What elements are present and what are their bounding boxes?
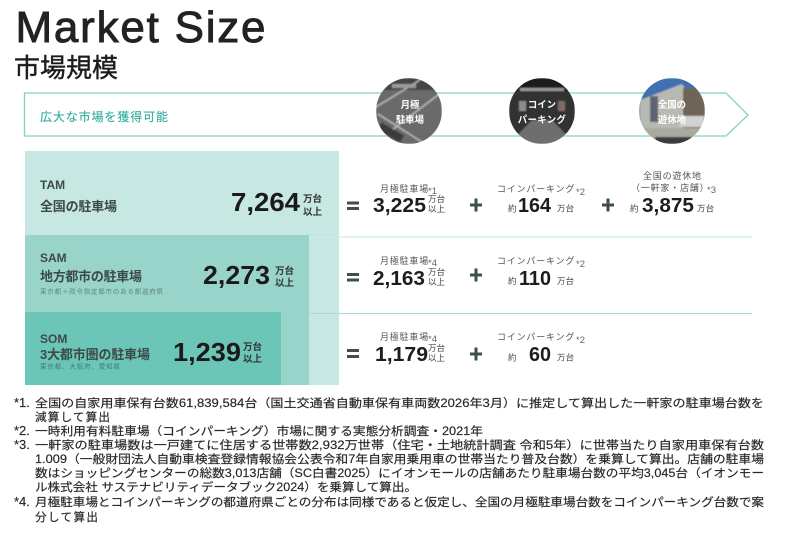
breakdown: TAM: （一軒家・店舗）: [631, 182, 709, 193]
breakdown: TAM: 以上: [428, 204, 446, 214]
footnotes: *4.: [14, 494, 30, 509]
breakdown: TAM: *2: [576, 187, 585, 198]
circle: coin parking: [509, 78, 575, 144]
footnotes: *2.: [14, 423, 30, 438]
panel: TAM: 全国の駐車場: [40, 199, 117, 214]
breakdown: SOM: 万台: [557, 352, 575, 362]
footnotes: 1.009（一般財団法人自動車検査登録情報協会公表令和7年自家用乗用車の世帯当たり普及台数）を乗算して算出。店舗の駐車場: [35, 452, 764, 466]
footnotes: 一軒家の駐車場数は一戸建てに住居する世帯数2,932万世帯（住宅・土地統計調査 令和5年）に世帯当たり自家用車保有台数: [35, 438, 764, 452]
panel: TAM: [25, 151, 339, 235]
panel: SAM: 地方都市の駐車場: [40, 269, 142, 284]
breakdown: TAM: 全国の遊休地: [643, 170, 702, 181]
breakdown: SOM: 約: [508, 352, 517, 362]
footnotes: 全国の自家用車保有台数61,839,584台（国土交通省自動車保有車両数2026年3月）に推定して算出した一軒家の駐車場台数を: [35, 396, 764, 410]
breakdown: SAM: *4: [428, 258, 437, 269]
breakdown: SAM: 以上: [428, 277, 446, 287]
subtitle: 市場規模: [14, 53, 118, 83]
title: Market Size: [16, 3, 266, 52]
panel: SOM: 1,239: [173, 337, 241, 367]
breakdown: SOM: [347, 331, 585, 366]
circle: monthly parking: [376, 78, 442, 144]
breakdown: TAM: *3: [707, 185, 716, 196]
breakdown: TAM: 万台: [557, 204, 575, 214]
panel: SAM: 2,273: [203, 260, 270, 290]
row divider SOM: [309, 312, 752, 314]
panel: SOM: SOM: [40, 332, 67, 346]
circle: coin parking: パーキング: [518, 114, 567, 125]
footnotes: 一時利用有料駐車場（コインパーキング）市場に関する実態分析調査・2021年: [35, 424, 483, 438]
breakdown: TAM: 3,225: [373, 195, 426, 217]
breakdown: SAM: [347, 255, 585, 290]
breakdown: TAM: 164: [518, 195, 552, 217]
footnotes: *1.: [14, 395, 30, 410]
panel: SAM: SAM: [40, 251, 67, 265]
breakdown: TAM: 万台: [428, 194, 446, 204]
panel: TAM: TAM: [40, 178, 65, 192]
circle: idle land: 遊休地: [658, 114, 687, 125]
breakdown: SAM: 月極駐車場: [380, 255, 429, 266]
breakdown: SOM: コインパーキング: [497, 331, 575, 342]
panel: SAM: 東京都＋政令指定都市のある都道府県: [40, 286, 164, 296]
panel: SOM: 万台: [243, 341, 263, 353]
breakdown: SOM: *4: [428, 334, 437, 345]
breakdown: SAM: 万台: [428, 267, 446, 277]
breakdown: TAM: 約: [630, 204, 639, 214]
breakdown: TAM: 3,875: [642, 195, 694, 217]
breakdown: SOM: 60: [529, 344, 551, 366]
circle: coin parking: コイン: [528, 99, 556, 110]
banner arrow: [24, 93, 748, 136]
panel: SOM: 以上: [243, 353, 263, 365]
breakdown: SAM: 約: [508, 276, 517, 286]
breakdown: SAM: コインパーキング: [497, 255, 575, 266]
breakdown: SAM: 万台: [557, 276, 575, 286]
circle: idle land: [639, 78, 705, 144]
breakdown: TAM: *1: [428, 186, 437, 197]
panel: TAM: 7,264: [231, 187, 301, 217]
panel: SOM: 東京都、大阪府、愛知県: [40, 362, 120, 370]
circle: monthly parking: 月極: [401, 99, 420, 110]
footnotes: [14, 395, 764, 524]
panel: SOM: [25, 312, 309, 385]
breakdown: SOM: *2: [576, 335, 585, 346]
breakdown: SOM: 以上: [428, 353, 446, 363]
footnotes: *3.: [14, 437, 30, 452]
footnotes: 分して算出: [35, 510, 98, 524]
breakdown: SOM: 万台: [428, 343, 446, 353]
breakdown: SOM: 1,179: [375, 344, 428, 366]
panel: SAM: 以上: [275, 277, 295, 289]
banner text: 広大な市場を獲得可能: [40, 109, 168, 124]
breakdown: SAM: 2,163: [373, 268, 425, 290]
circle: idle land: 全国の: [658, 99, 686, 110]
footnotes: ル株式会社 サステナビリティデータブック2024）を乗算して算出。: [35, 480, 417, 494]
footnotes: 数はショッピングセンターの総数3,013店舗（SC白書2025）にイオンモールの店舗あたり駐車場台数の平均3,045台（イオンモー: [35, 466, 764, 480]
breakdown: TAM: コインパーキング: [497, 183, 575, 194]
breakdown: SAM: 110: [519, 268, 551, 290]
breakdown: SAM: *2: [576, 259, 585, 270]
panel: SOM: 3大都市圏の駐車場: [40, 347, 150, 362]
breakdown: TAM: 約: [508, 204, 517, 214]
breakdown: TAM: 月極駐車場: [380, 183, 429, 194]
panel: TAM: 以上: [303, 206, 323, 218]
footnotes: 減算して算出: [35, 410, 110, 424]
breakdown: TAM: 万台: [697, 204, 715, 214]
panel: TAM: 万台: [303, 193, 323, 205]
footnotes: 月極駐車場とコインパーキングの都道府県ごとの分布は同様であると仮定し、全国の月極駐車場台数をコインパーキング台数で案: [35, 495, 764, 509]
breakdown: SOM: 月極駐車場: [380, 331, 429, 342]
breakdown: TAM: [347, 170, 716, 217]
circle: monthly parking: 駐車場: [396, 114, 425, 125]
panel: SAM: 万台: [275, 265, 295, 277]
panel: SAM: [25, 235, 339, 385]
row divider SAM: [309, 236, 752, 238]
